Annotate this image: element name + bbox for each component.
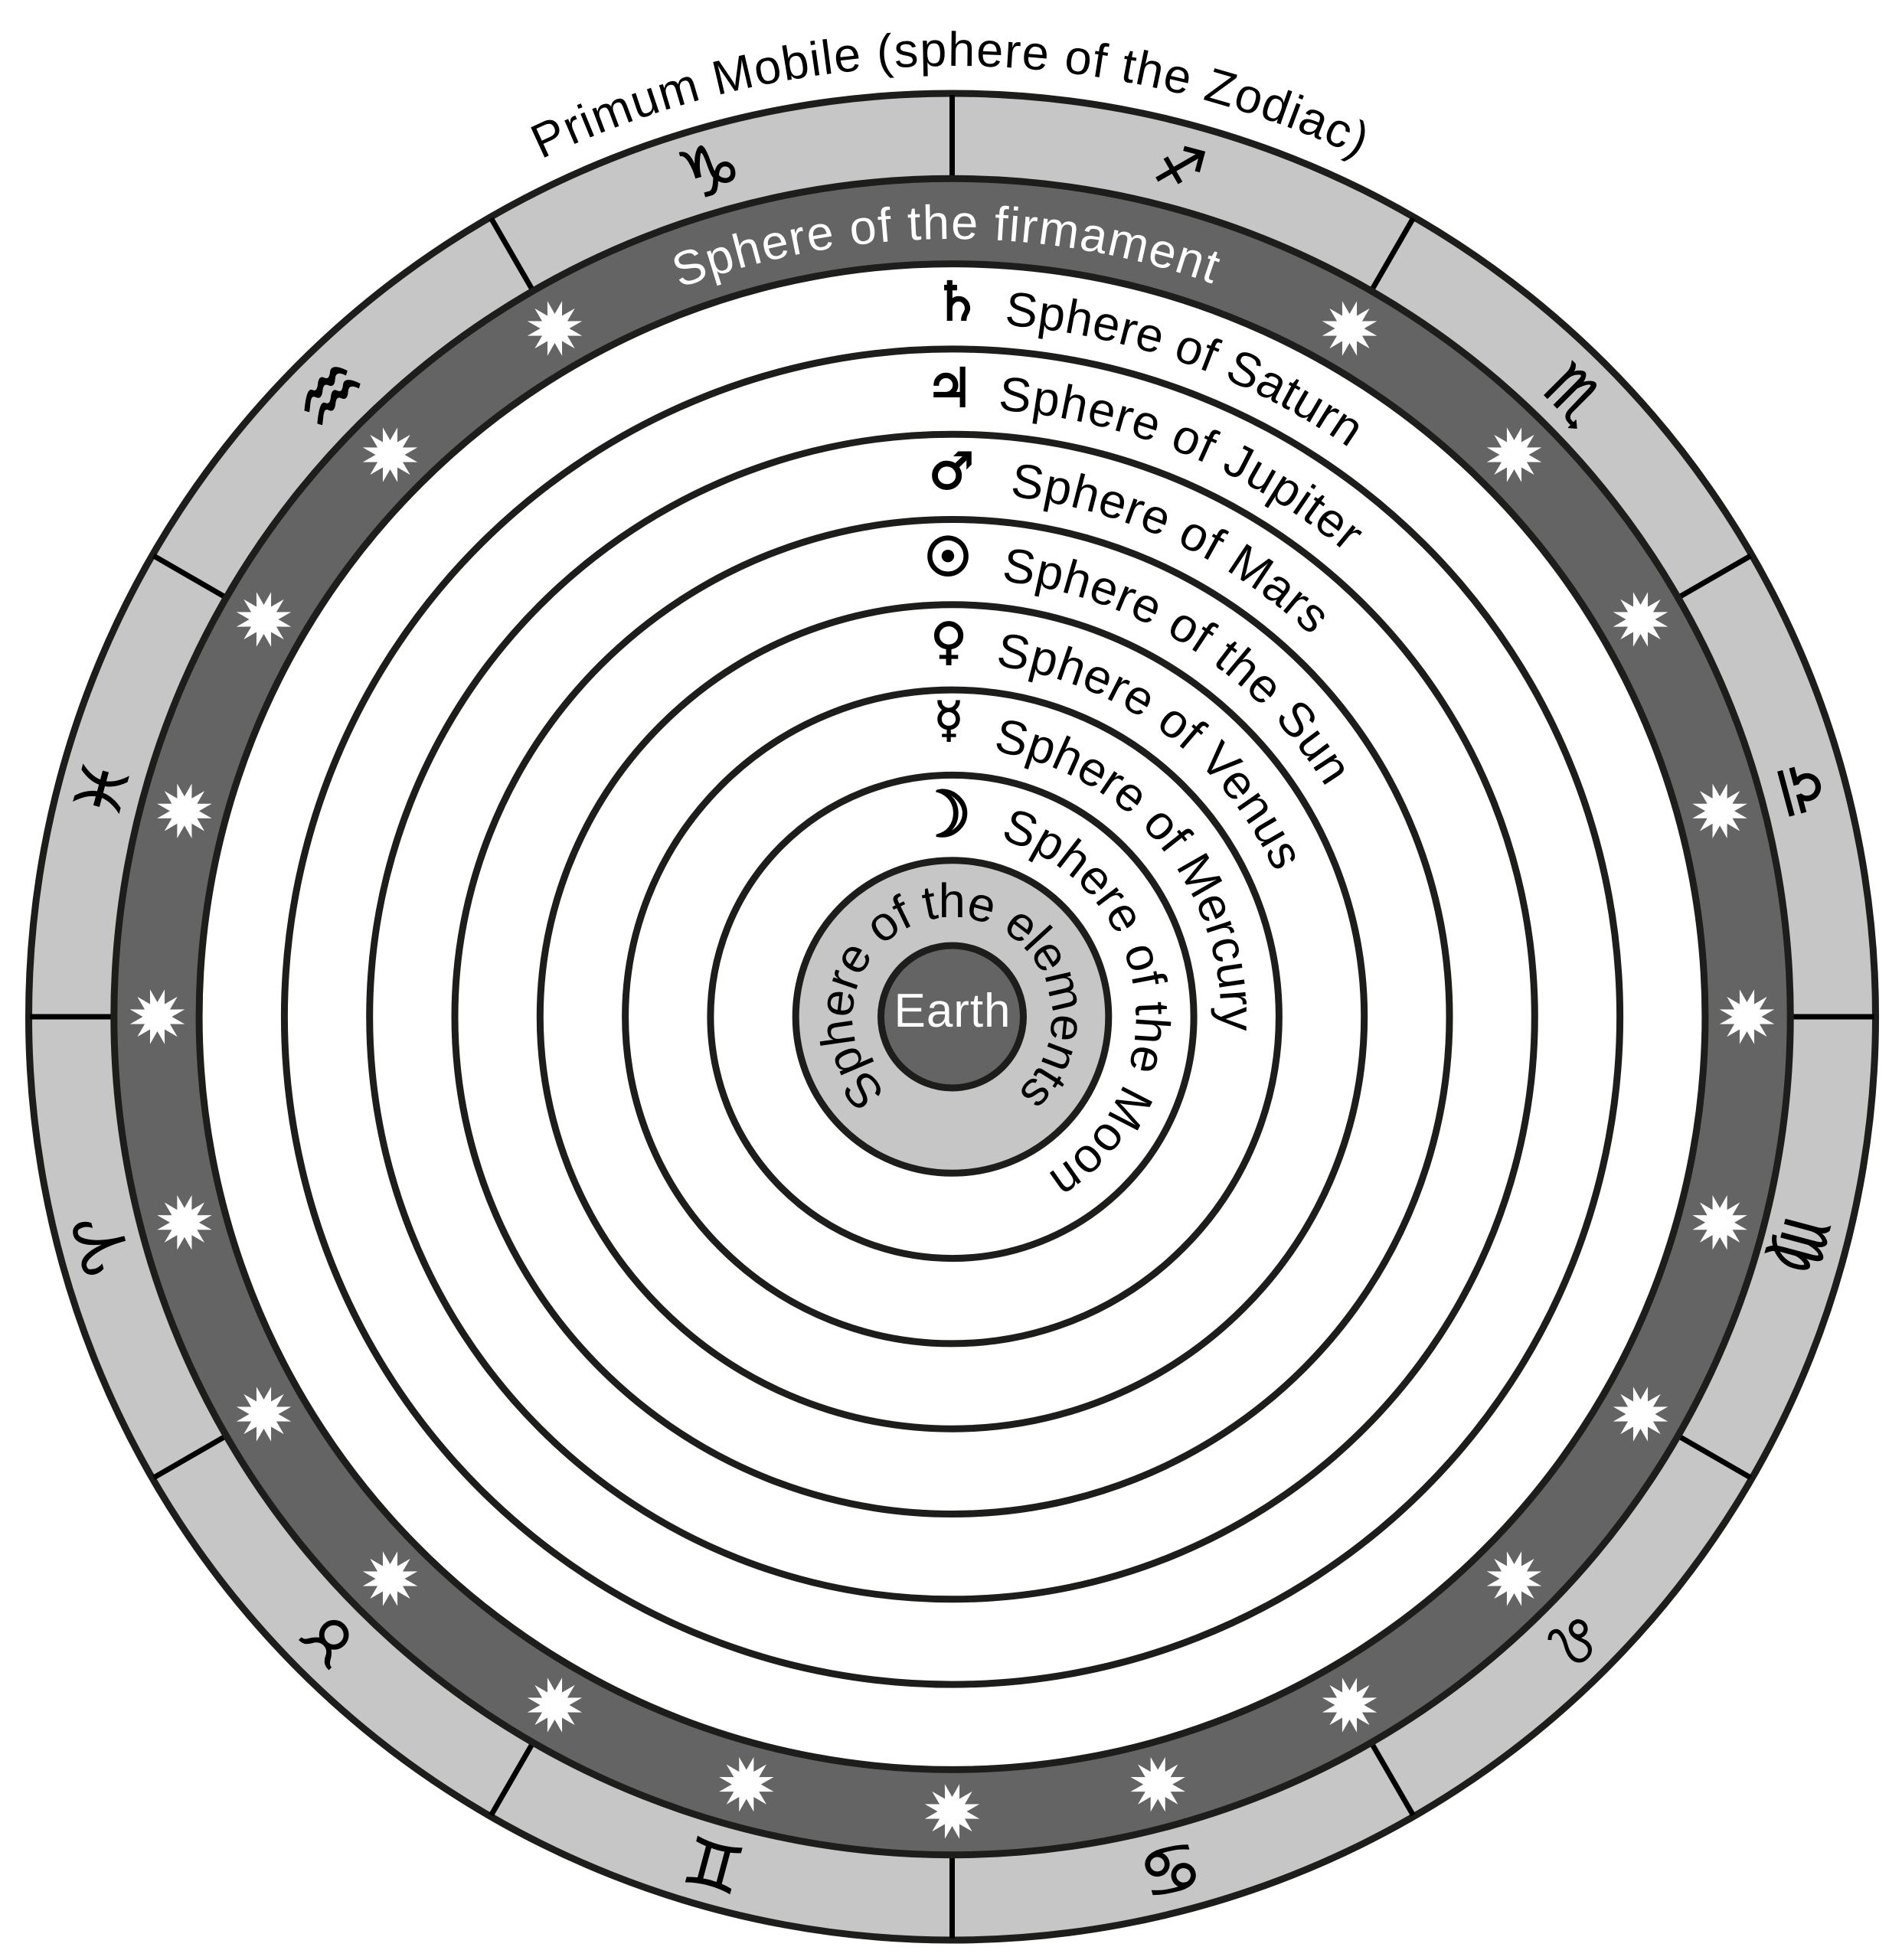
icon: Pisces: ♓︎	[59, 752, 146, 827]
label: firmament: Sphere of the firmament	[674, 204, 1221, 286]
icon: Saturn: ♄	[933, 270, 981, 333]
ring: sphere of Mercury	[626, 690, 1279, 1344]
ring: sphere of the elements	[796, 861, 1109, 1173]
ring: sphere of the Sun	[455, 519, 1449, 1514]
ring: sphere of Mars	[370, 434, 1534, 1599]
planet symbols	[915, 270, 981, 851]
icon: Mars: ♂	[929, 442, 974, 501]
icon: Taurus: ♉︎	[287, 1596, 372, 1681]
ring: sphere of Venus	[540, 605, 1364, 1429]
icon: Scorpio: ♏︎	[1529, 351, 1619, 439]
disc: Earth	[881, 946, 1023, 1088]
label: Venus: Sphere of Venus	[998, 634, 1296, 868]
icon: Capricorn: ♑︎	[669, 125, 750, 218]
label: Earth: Earth	[894, 985, 1011, 1037]
icon: Sun: ☉	[925, 528, 971, 588]
ring: sphere of Jupiter	[284, 349, 1620, 1684]
label: Saturn: Sphere of Saturn	[1007, 292, 1358, 446]
icon: Virgo: ♍︎	[1759, 1207, 1843, 1281]
icon: Jupiter: ♃	[926, 357, 973, 420]
icon: Cancer: ♋︎	[1130, 1822, 1211, 1916]
label: Moon: Sphere of the Moon	[1005, 811, 1172, 1191]
stars of the firmament	[130, 301, 1774, 1839]
icon: Mercury: ☿	[933, 692, 964, 749]
label: Sun: Sphere of the Sun	[1005, 550, 1344, 785]
label: elements: Sphere of the elements	[819, 882, 1077, 1108]
icon: Aries: ♈︎	[58, 1206, 148, 1282]
label: Primum Mobile: Primum Mobile (sphere of the Zodiac)	[531, 31, 1364, 162]
icon: Venus: ♀	[930, 612, 967, 671]
ring: sphere of Saturn	[199, 264, 1705, 1769]
label: Mercury: Sphere of Mercury	[997, 720, 1247, 1031]
icon: Libra: ♎︎	[1759, 753, 1843, 826]
icon: Gemini: ♊︎	[677, 1820, 752, 1907]
icon: Leo: ♌︎	[1529, 1594, 1619, 1683]
icon: Sagittarius: ♐︎	[1148, 129, 1212, 204]
label: Jupiter: Sphere of Jupiter	[1000, 377, 1362, 547]
label: Mars: Sphere of Mars	[1012, 464, 1325, 632]
ring: sphere of the Moon	[711, 775, 1194, 1259]
icon: Moon: ☽	[915, 779, 971, 851]
icon: Aquarius: ♒︎	[272, 336, 388, 453]
ring: sphere of the firmament	[114, 178, 1790, 1855]
